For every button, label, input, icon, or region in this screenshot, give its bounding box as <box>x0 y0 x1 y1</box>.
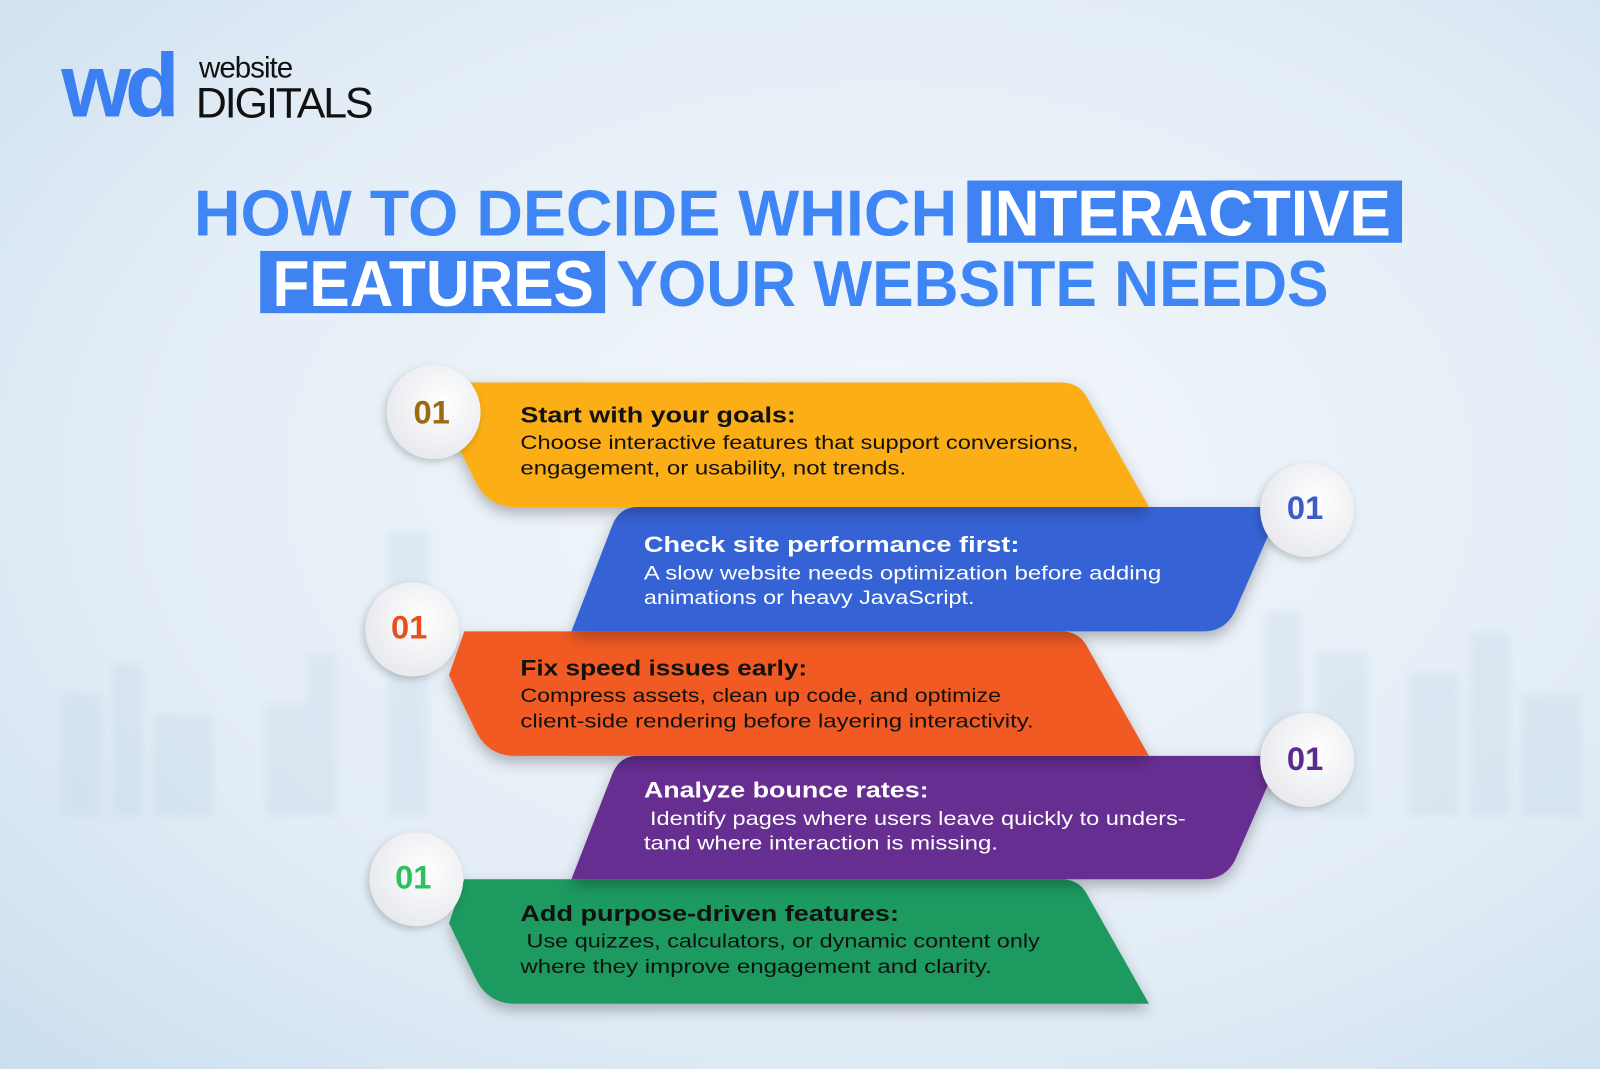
number badge 4: 01 <box>1287 740 1323 777</box>
step 5: green band: Use quizzes, calculators, or dynamic content only <box>527 931 1040 953</box>
title: HOW TO DECIDE WHICH <box>194 177 957 250</box>
background city skyline <box>61 530 1582 816</box>
logo <box>60 36 372 136</box>
step 1: yellow band: Start with your goals: <box>520 402 796 427</box>
step 3: orange band: Fix speed issues early: <box>520 655 807 680</box>
step 4: purple band: tand where interaction is missing. <box>644 833 998 855</box>
logo: website <box>198 52 293 85</box>
step 4: purple band: Analyze bounce rates: <box>644 778 929 803</box>
step 3: orange band <box>449 631 1149 756</box>
step 5: green band: where they improve engagement and clarity. <box>519 956 992 978</box>
number badge 2: 01 <box>1287 489 1323 526</box>
number badge 3 <box>365 582 459 676</box>
step 4: purple band: Identify pages where users leave quickly to unders- <box>650 808 1186 830</box>
title: INTERACTIVE <box>978 177 1391 250</box>
step 2: blue band <box>571 507 1281 631</box>
step 5: green band <box>449 879 1149 1004</box>
number badge 2 <box>1260 463 1354 557</box>
step 1: yellow band: Choose interactive features that support conversions, <box>520 432 1079 454</box>
title: FEATURES <box>272 247 594 320</box>
title: YOUR WEBSITE NEEDS <box>616 247 1329 320</box>
number badge 4 <box>1260 713 1354 807</box>
title <box>194 177 1402 320</box>
number badge 3: 01 <box>391 609 427 646</box>
logo: DIGITALS <box>196 79 372 127</box>
step 3: orange band: Compress assets, clean up code, and optimize <box>520 685 1001 707</box>
number badge 1 <box>387 365 481 459</box>
step 3: orange band: client-side rendering before layering interactivity. <box>520 710 1034 732</box>
step 2: blue band: A slow website needs optimization before adding <box>644 562 1161 584</box>
step 4: purple band <box>571 756 1281 879</box>
number badge 5 <box>369 832 463 926</box>
number badge 5: 01 <box>395 858 431 895</box>
step 2: blue band: animations or heavy JavaScript. <box>644 587 974 609</box>
logo: wd <box>60 36 174 136</box>
step 1: yellow band <box>449 383 1149 507</box>
step 5: green band: Add purpose-driven features: <box>520 901 899 926</box>
step 1: yellow band: engagement, or usability, not trends. <box>520 457 906 479</box>
number badge 1: 01 <box>413 393 450 430</box>
step 2: blue band: Check site performance first: <box>644 532 1019 557</box>
